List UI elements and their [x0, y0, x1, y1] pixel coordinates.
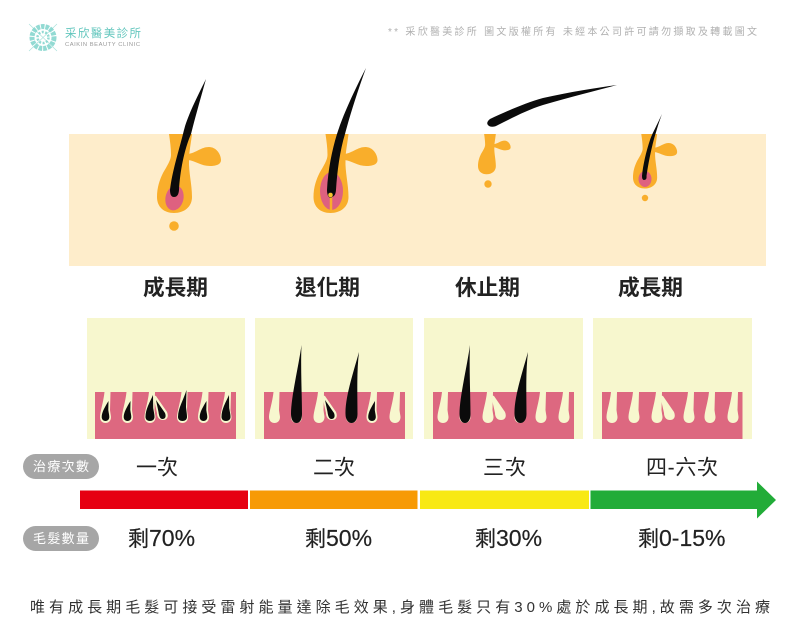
value: 50 percent: 剩50%: [305, 525, 372, 551]
row label: treatment count: [23, 454, 99, 479]
logo subtitle: CAIKIN BEAUTY CLINIC: [65, 42, 140, 48]
icon: teal snowflake emblem: [29, 24, 57, 51]
icon: follicle telogen: [478, 85, 617, 188]
row label: hair amount: [23, 526, 99, 551]
panel: fourth to sixth treatment: [593, 318, 752, 439]
label: anagen again: 成長期: [618, 275, 683, 300]
count: four to six: 四-六次: [646, 456, 718, 480]
value: 0 to 15 percent: 剩0-15%: [638, 525, 725, 551]
row label: treatment count: 治療次數: [33, 459, 89, 474]
label: telogen: 休止期: [455, 275, 520, 300]
logo name: 采欣醫美診所: [65, 26, 142, 40]
count: three: 三次: [483, 456, 526, 480]
logo: [29, 24, 142, 51]
count: one: 一次: [136, 456, 178, 480]
label: anagen: 成長期: [143, 275, 208, 300]
count: two: 二次: [313, 456, 355, 480]
treatment counts: [136, 456, 718, 480]
remaining hair values: [128, 525, 725, 551]
label: catagen: 退化期: [295, 275, 360, 300]
icon: follicle catagen: [314, 68, 378, 213]
panel: skin band: [69, 134, 766, 266]
footer note: 唯有成長期毛髮可接受雷射能量達除毛效果,身體毛髮只有30%處於成長期,故需多次治療: [30, 598, 770, 616]
progress arrow: [80, 482, 776, 518]
panel: second treatment: [255, 318, 413, 439]
copyright notice: ** 采欣醫美診所 圖文版權所有 未經本公司許可請勿擷取及轉載圖文: [388, 25, 757, 38]
panel: third treatment: [424, 318, 583, 439]
phase labels: [143, 275, 683, 300]
value: 70 percent: 剩70%: [128, 525, 195, 551]
value: 30 percent: 剩30%: [475, 525, 542, 551]
panel: first treatment: [87, 318, 245, 439]
icon: follicle anagen: [157, 79, 221, 231]
icon: follicle new anagen: [633, 114, 677, 201]
row label: hair amount: 毛髮數量: [33, 531, 89, 546]
